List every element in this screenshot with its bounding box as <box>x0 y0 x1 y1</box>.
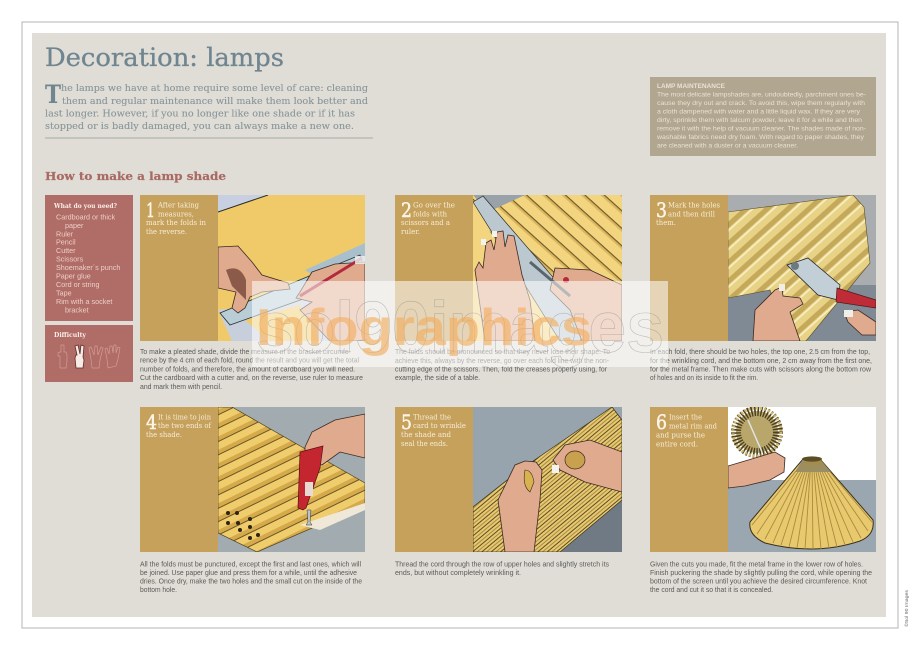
panel: what do you need: Ruler <box>56 229 74 238</box>
step 1 instruction box <box>140 195 218 341</box>
step 5 body text <box>395 560 609 577</box>
step 1 body text: To make a pleated shade, divide the measure of the bracket circumfe- <box>140 347 352 356</box>
panel: what do you need: Pencil <box>56 238 76 247</box>
step 6 body text: Given the cuts you made, fit the metal frame in the lower row of holes. <box>650 560 863 568</box>
step 3 instruction box: Mark the holes <box>668 200 720 210</box>
step 4 instruction box: the shade. <box>146 430 182 439</box>
panel: difficulty: Difficulty <box>54 331 86 339</box>
step 4 body text: bottom hole. <box>140 585 177 594</box>
step 5 instruction box: Thread the <box>413 412 451 422</box>
illustration: marking folds with ruler <box>218 195 365 341</box>
panel: what do you need: Shoemaker´s punch <box>56 263 120 272</box>
step 6 body text: Finish puckering the shade by slightly pulling the cord, while opening the <box>650 568 872 577</box>
step 5 body text: Thread the cord through the row of upper holes and slightly stretch its <box>395 560 609 568</box>
section heading: How to make a lamp shade <box>45 169 226 183</box>
step 2 body text: example, the side of a table. <box>395 373 480 382</box>
panel: what do you need: bracket <box>65 305 89 314</box>
step 2 <box>395 195 622 341</box>
panel: lamp maintenance <box>650 77 876 156</box>
step 5 body text: ends, but without completely wrinkling it. <box>395 568 521 577</box>
icon: hand three fingers <box>89 346 103 368</box>
step 3 body text: of holes and on its inside to fit the rim. <box>650 373 758 382</box>
panel: what do you need <box>45 195 133 321</box>
copyright credit: ©Sol 90 Images <box>903 589 909 627</box>
panel: what do you need: Cord or string <box>56 280 100 289</box>
step 4 <box>140 407 365 552</box>
step 6 instruction box: Insert the <box>669 412 702 422</box>
step 6 instruction box: entire cord. <box>656 439 698 448</box>
step 1 instruction box: 1 <box>146 198 155 222</box>
drop cap: T <box>45 80 61 109</box>
step 3 <box>650 195 876 341</box>
icon: hand two fingers <box>75 345 84 368</box>
step 4 instruction box <box>140 407 218 552</box>
step 5 instruction box: card to wrinkle <box>413 421 466 430</box>
step 4 body text: All the folds must be punctured, except the first and last ones, which will <box>140 560 361 568</box>
illustration: drilling holes with punch <box>728 195 876 341</box>
watermark: Infographics <box>256 299 592 357</box>
step 4 instruction box: the two ends of <box>158 421 212 430</box>
illustration: gluing ends of the shade <box>218 407 365 552</box>
step 4 body text: be joined. Use paper glue and press them for a while, until the adhesive <box>140 568 357 577</box>
step 1 instruction box: After taking <box>157 200 199 210</box>
illustration: going over folds with scissors <box>473 195 622 341</box>
panel: lamp maintenance: dirty, sprinkle them with talcum powder, leave it for a while and then <box>657 117 862 124</box>
panel: difficulty <box>45 325 133 382</box>
panel: what do you need: paper <box>65 221 84 230</box>
icon: hand one finger <box>58 345 67 368</box>
step 2 body text: The folds should be pronounced so that they never lose their shape. To <box>395 347 610 356</box>
panel: lamp maintenance: a cloth dampened with water and a little liquid wax. If they are very <box>657 108 861 116</box>
step 2 body text: achieve this, always by the reverse, go over each fold line with the non- <box>395 356 610 365</box>
illustration: finished lamp shade <box>728 407 876 552</box>
panel: what do you need: Scissors <box>56 255 84 264</box>
step 5 <box>395 407 622 552</box>
step 1 instruction box: measures, <box>158 209 194 218</box>
step 6 body text: the cord and cut it so that it is concealed. <box>650 585 773 594</box>
step 6 body text <box>650 560 872 594</box>
watermark: sol90images <box>256 288 664 368</box>
step 2 instruction box <box>395 195 473 341</box>
title: Decoration: lamps <box>45 43 284 72</box>
step 3 instruction box: and then drill <box>668 209 716 218</box>
step 6 instruction box: 6 <box>656 410 667 434</box>
step 5 instruction box <box>395 407 473 552</box>
panel: what do you need: Cardboard or thick <box>56 212 116 222</box>
step 3 instruction box <box>650 195 728 341</box>
step 6 instruction box: metal rim and <box>669 422 717 430</box>
step 2 instruction box: folds with <box>413 209 447 218</box>
step 2 instruction box: scissors and a <box>401 218 450 227</box>
intro text: stopped or is badly damaged, you can always make a new one. <box>45 121 354 132</box>
step 1 <box>140 195 365 341</box>
panel: lamp maintenance: cause they dry out and crack. To avoid this, wipe them regularly with <box>657 100 865 107</box>
step 2 instruction box: 2 <box>401 198 412 222</box>
step 2 instruction box: Go over the <box>413 200 455 210</box>
step 6 instruction box <box>650 407 728 552</box>
step 4 body text <box>140 560 362 594</box>
step 1 body text: rence by the 4 cm of each fold, round the result and you will get the total <box>140 356 359 364</box>
step 5 instruction box: 5 <box>401 410 412 434</box>
panel: lamp maintenance: are cleaned with a duster or a vacuum cleaner. <box>657 142 798 150</box>
step 5 instruction box: the shade and <box>401 430 451 439</box>
step 3 body text <box>650 347 872 382</box>
step 1 instruction box: the reverse. <box>146 227 187 236</box>
step 3 instruction box: 3 <box>656 198 667 222</box>
panel: lamp maintenance: washable fabrics need dry foam. With regard to paper shades, they <box>656 134 865 141</box>
panel: what do you need: What do you need? <box>53 202 117 210</box>
step 4 body text: dries. Once dry, make the two holes and the small cut on the inside of the <box>140 576 362 586</box>
step 6 instruction box: and purse the <box>656 430 705 439</box>
step 3 body text: for the metal frame. Then make cuts with scissors along the bottom row <box>650 364 872 374</box>
panel: what do you need: Cutter <box>56 246 76 255</box>
panel: what do you need: Paper glue <box>56 272 91 281</box>
step 4 instruction box: It is time to join <box>158 412 211 422</box>
panel: lamp maintenance: The most delicate lampshades are, undoubtedly, parchment ones be- <box>657 92 866 98</box>
panel: what do you need: Rim with a socket <box>56 297 112 306</box>
step 2 body text: cutting edge of the scissors. Then, fold the creases properly using, for <box>395 364 608 374</box>
step 5 instruction box: seal the ends. <box>401 439 448 448</box>
intro text <box>45 80 368 132</box>
step 3 body text: In each fold, there should be two holes, the top one, 2.5 cm from the top, <box>650 347 870 356</box>
step 3 body text: for the wrinkling cord, and the bottom one, 2 cm away from the first one, <box>650 356 872 365</box>
illustration: threading the cord <box>473 407 622 552</box>
intro text: them and regular maintenance will make them look better and <box>62 96 368 107</box>
step 1 body text: Cut the cardboard with a cutter and, on the reverse, use ruler to measure <box>140 373 363 382</box>
step 6 <box>650 407 876 552</box>
step 4 instruction box: 4 <box>146 410 157 434</box>
intro text: last longer. However, if you no longer like one shade or if it has <box>45 108 355 120</box>
step 2 body text <box>395 347 610 382</box>
intro text: he lamps we have at home require some level of care: cleaning <box>61 83 368 94</box>
step 2 instruction box: ruler. <box>401 227 420 236</box>
panel: what do you need: Tape <box>56 288 72 297</box>
panel: lamp maintenance: LAMP MAINTENANCE <box>657 83 726 90</box>
step 1 body text <box>140 347 363 391</box>
step 6 body text: bottom of the screen until you achieve the desired circumference. Knot <box>650 576 867 586</box>
step 1 instruction box: mark the folds in <box>146 218 206 227</box>
step 1 body text: and mark them with pencil. <box>140 382 222 391</box>
step 1 body text: number of folds, and therefore, the amount of cardboard you will need. <box>140 364 355 374</box>
icon: hand four fingers <box>105 345 120 368</box>
step 3 instruction box: them. <box>656 218 676 227</box>
panel: lamp maintenance: remove it with the help of vacuum cleaner. The shades made of non- <box>657 126 866 132</box>
